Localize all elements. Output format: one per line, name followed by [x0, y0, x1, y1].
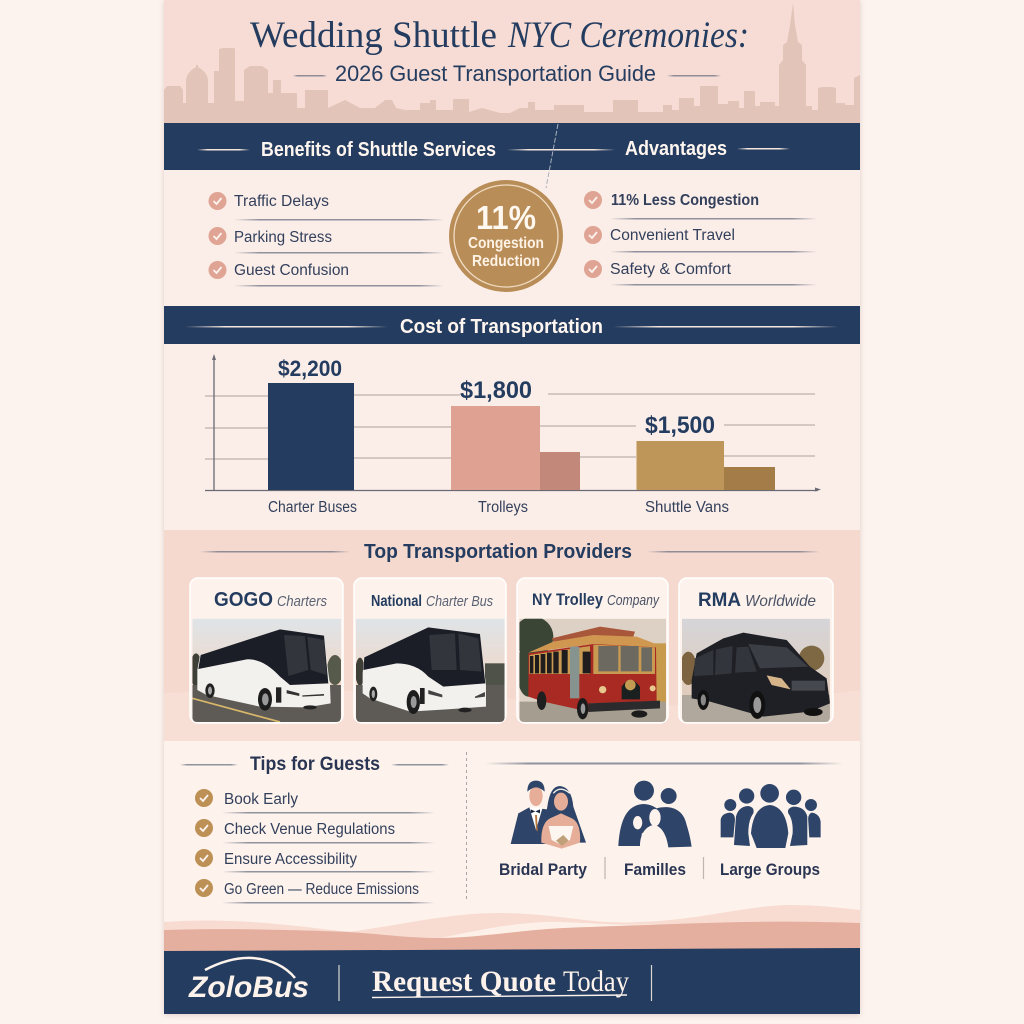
photo: coach bus	[190, 619, 343, 722]
card: National Charter Bus: Charter Bus	[426, 594, 493, 610]
banner: cost of transportation: Cost of Transportation	[400, 316, 603, 338]
advantage item: Convenient Travel	[610, 227, 735, 244]
label: Familles	[624, 860, 686, 879]
benefit item	[208, 227, 444, 254]
bar: trolleys: $1,800	[460, 377, 532, 404]
heading: Tips for Guests	[250, 754, 380, 775]
card: RMA Worldwide: Worldwide	[745, 593, 816, 610]
title emphasis: NYC Ceremonies:	[507, 15, 749, 56]
advantage item: Safety & Comfort	[610, 261, 732, 278]
benefit item: Traffic Delays	[234, 193, 329, 210]
bar: shuttle vans: Shuttle Vans	[645, 499, 729, 516]
badge: 11% congestion reduction: Congestion	[468, 235, 544, 252]
panel: audience groups	[499, 781, 821, 879]
heading: advantages: Advantages	[625, 138, 727, 160]
banner: benefits and advantages	[164, 123, 860, 170]
tip item	[195, 879, 435, 904]
bar chart	[205, 354, 821, 516]
photo: coach bus	[355, 619, 505, 722]
subtitle: 2026 Guest Transportation Guide	[335, 61, 656, 86]
advantage item: 11% Less Congestion	[611, 192, 759, 209]
bar: shuttle vans: $1,500	[645, 412, 715, 439]
label: Large Groups	[720, 860, 820, 879]
icon: families	[618, 781, 692, 847]
decorative waves	[164, 905, 860, 952]
benefit item: Guest Confusion	[234, 262, 349, 279]
icon: large groups	[721, 784, 821, 848]
bar: charter buses: Charter Buses	[268, 499, 357, 516]
tip item: Check Venue Regulations	[224, 821, 395, 838]
tip item	[195, 819, 435, 844]
tip item: Ensure Accessibility	[224, 851, 357, 868]
benefit item: Parking Stress	[234, 229, 332, 246]
panel: advantages list	[584, 191, 817, 286]
infographic poster	[162, 0, 862, 1017]
panel: top transportation providers	[164, 530, 860, 741]
benefit item	[208, 192, 444, 220]
footer banner	[164, 948, 860, 1014]
tip item: Book Early	[224, 791, 298, 808]
card: GOGO Charters: GOGO	[214, 589, 273, 611]
card: GOGO Charters: Charters	[277, 594, 327, 610]
badge: 11% congestion reduction: 11%	[476, 199, 536, 236]
tip item	[195, 849, 435, 872]
card: NY Trolley Company: Company	[607, 592, 660, 609]
card: National Charter Bus: National	[371, 593, 422, 610]
bar: trolleys	[451, 377, 580, 516]
benefit item	[208, 261, 444, 286]
advantage item	[584, 226, 817, 252]
label: Bridal Party	[499, 860, 587, 879]
card: National Charter Bus	[354, 578, 506, 723]
call to action: Today	[563, 965, 629, 998]
card: GOGO Charters	[190, 578, 343, 723]
photo: red trolley	[513, 617, 666, 722]
logo: ZoloBus: ZoloBus	[188, 971, 309, 1004]
bar: charter buses: $2,200	[278, 356, 342, 381]
panel: header	[164, 0, 860, 123]
card: NY Trolley Company	[513, 578, 668, 723]
card: NY Trolley Company: NY Trolley	[532, 590, 603, 609]
call to action: Request Quote	[372, 965, 556, 998]
skyline	[164, 3, 860, 123]
card: RMA Worldwide	[679, 578, 833, 723]
bar: charter buses	[268, 356, 357, 516]
icon: bridal party	[511, 781, 586, 849]
badge: 11% congestion reduction	[449, 180, 563, 292]
panel: benefits list	[208, 192, 444, 286]
tip item: Go Green — Reduce Emissions	[224, 881, 419, 898]
heading: benefits: Benefits of Shuttle Services	[261, 139, 496, 161]
tip item	[195, 789, 435, 814]
advantage item	[584, 260, 817, 286]
heading: Top Transportation Providers	[364, 541, 632, 563]
photo: black van	[680, 619, 830, 722]
bar: trolleys: Trolleys	[478, 499, 528, 516]
advantage item	[584, 191, 817, 220]
card: RMA Worldwide: RMA	[698, 590, 741, 611]
banner: cost of transportation	[164, 306, 860, 344]
title: Wedding Shuttle	[250, 15, 497, 56]
bar: shuttle vans	[636, 412, 775, 516]
panel: tips for guests	[164, 741, 860, 931]
badge: 11% congestion reduction: Reduction	[472, 253, 540, 270]
